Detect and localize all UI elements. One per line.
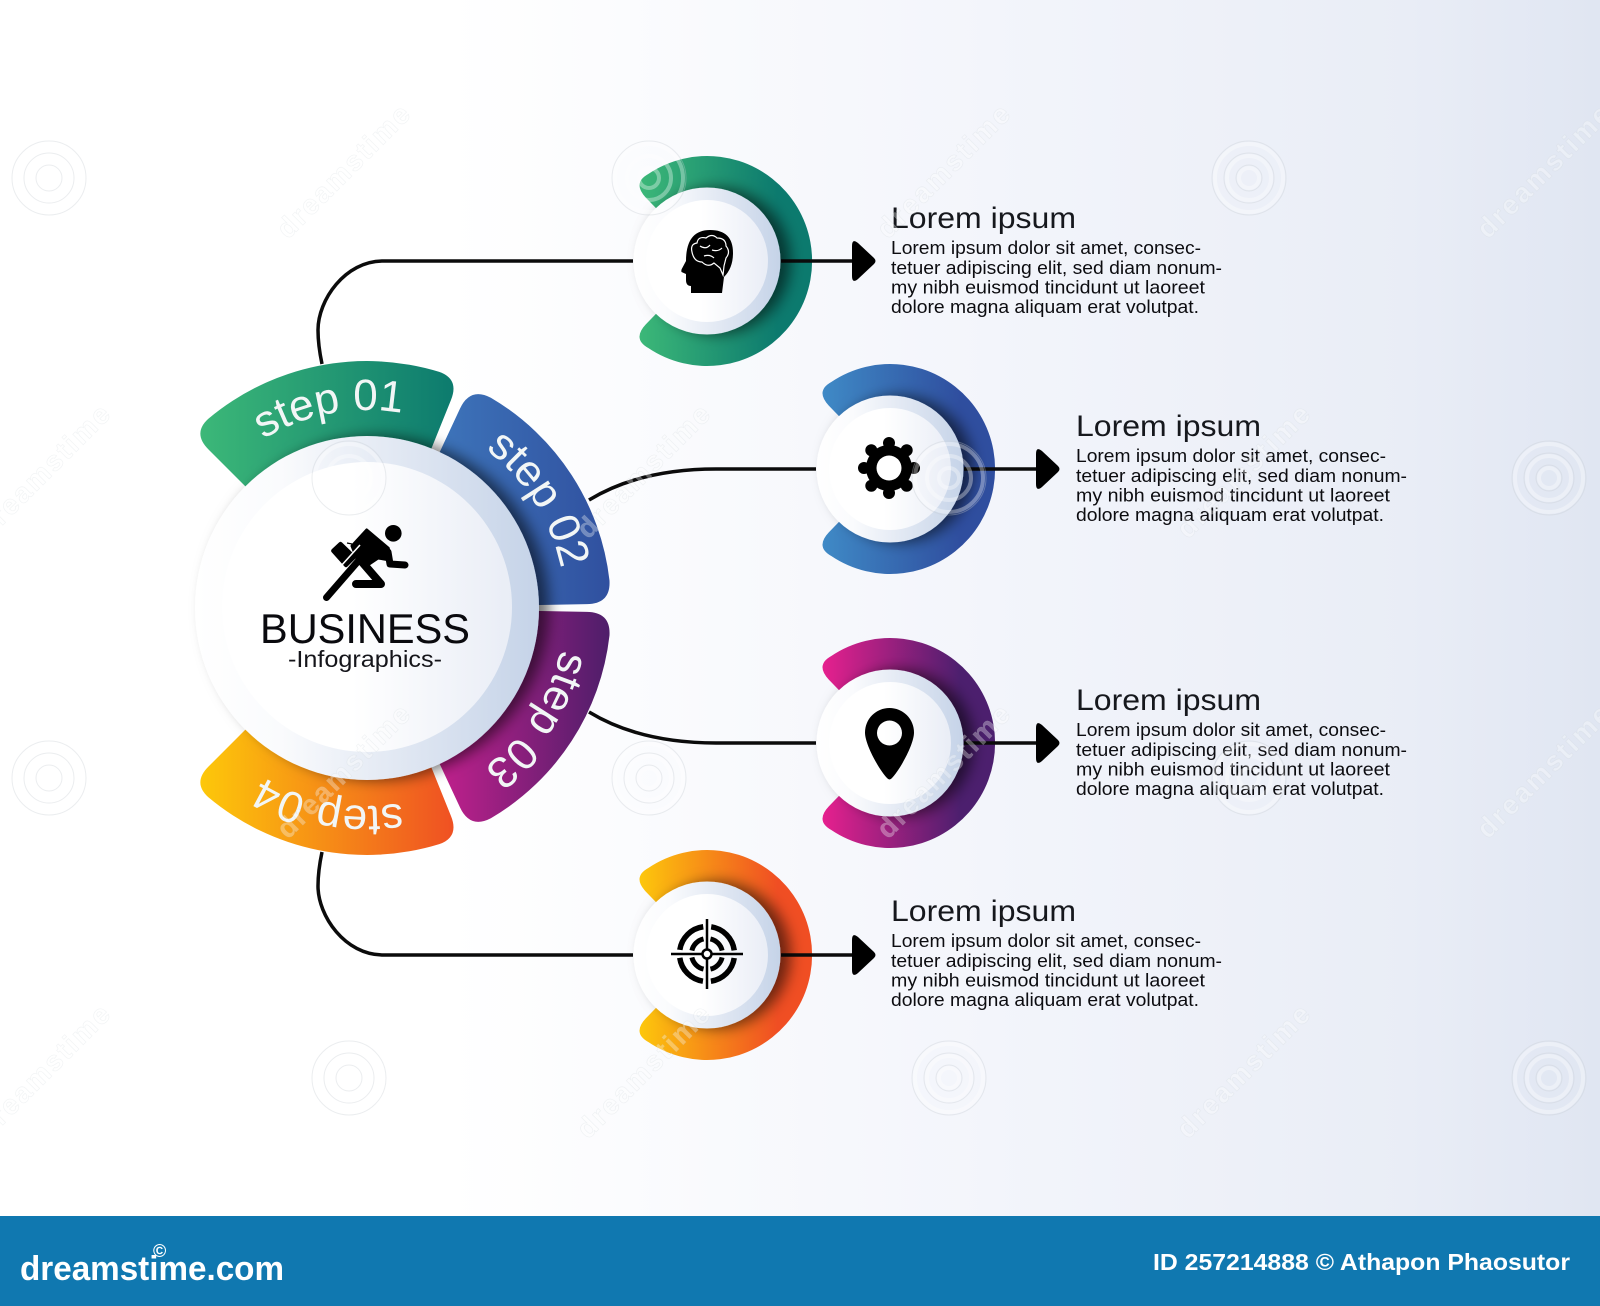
watermark overlay: dreamstime xyxy=(270,97,418,244)
step labels: step 03 xyxy=(488,652,582,787)
item 2: blue node xyxy=(816,364,1060,574)
step segment 01 xyxy=(192,340,467,503)
item 1 text: my nibh euismod tincidunt ut laoreet xyxy=(891,276,1205,298)
step segment 02 xyxy=(415,373,638,636)
step segment 04 xyxy=(192,713,467,876)
item 3 text: dolore magna aliquam erat volutpat. xyxy=(1076,778,1384,799)
step labels: step 04 xyxy=(253,780,402,834)
watermark overlay: dreamstime xyxy=(870,97,1018,244)
step labels: step 01 xyxy=(256,379,400,436)
item 4 text xyxy=(891,895,1222,1010)
item 4 text: Lorem ipsum xyxy=(891,895,1076,928)
item 4 text: my nibh euismod tincidunt ut laoreet xyxy=(891,970,1205,990)
item 1 text: Lorem ipsum dolor sit amet, consec- xyxy=(891,237,1201,258)
central hub disc xyxy=(195,436,539,780)
item 4 text: dolore magna aliquam erat volutpat. xyxy=(891,989,1199,1010)
icon: target xyxy=(671,919,743,989)
item 4 text: Lorem ipsum dolor sit amet, consec- xyxy=(891,930,1201,951)
watermark overlay: dreamstime xyxy=(270,697,418,844)
item 4: orange node xyxy=(634,850,876,1060)
watermark overlay: dreamstime xyxy=(570,397,718,544)
footer bar: ID 257214888 © Athapon Phaosutor xyxy=(1153,1249,1570,1275)
watermark overlay: dreamstime xyxy=(1170,397,1318,544)
footer bar: © xyxy=(153,1241,166,1261)
item 1 text: dolore magna aliquam erat volutpat. xyxy=(891,296,1199,317)
item 2 text: tetuer adipiscing elit, sed diam nonum- xyxy=(1076,465,1407,486)
watermark overlay: dreamstime xyxy=(870,697,1018,844)
connector lines xyxy=(318,261,816,955)
item 1 text: Lorem ipsum xyxy=(891,202,1076,235)
footer bar: dreamstime.com xyxy=(20,1250,284,1288)
item 4 text: tetuer adipiscing elit, sed diam nonum- xyxy=(891,950,1222,971)
item 1 text xyxy=(891,202,1222,317)
footer bar xyxy=(0,1216,1600,1306)
item 3: purple node xyxy=(816,638,1060,848)
title: BUSINESS: BUSINESS xyxy=(260,605,470,652)
item 3 text: Lorem ipsum xyxy=(1076,684,1261,717)
icon: running businessman xyxy=(326,525,405,598)
item 1 text: tetuer adipiscing elit, sed diam nonum- xyxy=(891,257,1222,278)
step segment 03 xyxy=(415,580,638,843)
item 3 text xyxy=(1076,684,1407,799)
item 2 text: Lorem ipsum xyxy=(1076,410,1261,443)
item 2 text: Lorem ipsum dolor sit amet, consec- xyxy=(1076,445,1386,466)
item 3 text: my nibh euismod tincidunt ut laoreet xyxy=(1076,758,1390,780)
subtitle: Infographics: -Infographics- xyxy=(288,646,442,672)
item 2 text xyxy=(1076,410,1407,525)
item 3 text: Lorem ipsum dolor sit amet, consec- xyxy=(1076,719,1386,740)
watermark overlay: dreamstime xyxy=(570,997,718,1144)
icon: location pin xyxy=(865,708,914,780)
item 2 text: my nibh euismod tincidunt ut laoreet xyxy=(1076,484,1390,506)
item 1: green node xyxy=(634,156,876,366)
step labels: step 02 xyxy=(489,435,588,566)
item 2 text: dolore magna aliquam erat volutpat. xyxy=(1076,504,1384,525)
icon: head with brain xyxy=(681,230,733,293)
watermark overlay: dreamstime xyxy=(1170,997,1318,1144)
step labels xyxy=(253,379,588,834)
icon: gear xyxy=(858,437,920,499)
item 3 text: tetuer adipiscing elit, sed diam nonum- xyxy=(1076,739,1407,760)
